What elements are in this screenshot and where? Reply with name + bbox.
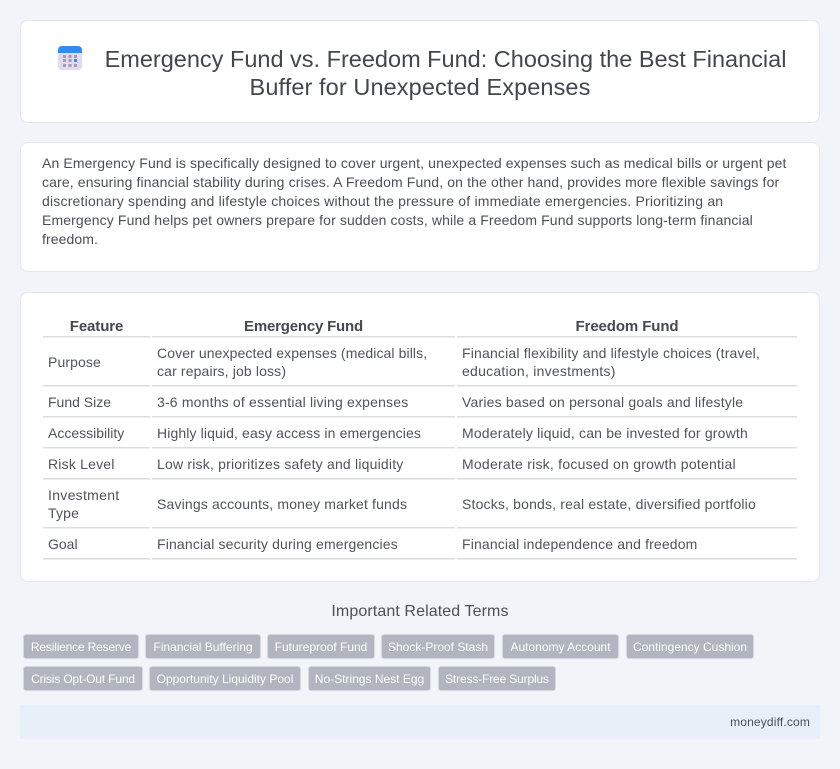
row: investment type: Savings accounts, money market funds: [157, 496, 407, 512]
table header row: [70, 318, 678, 335]
tag: [23, 666, 143, 691]
row: accessibility: Highly liquid, easy access in emergencies: [157, 425, 421, 441]
row: fund size: [48, 394, 743, 410]
tag: Crisis Opt-Out Fund: [31, 672, 135, 686]
row: risk level: [48, 456, 736, 472]
footer credit: moneydiff.com: [730, 715, 810, 729]
table header row: Feature: [70, 318, 123, 335]
row: purpose: Financial flexibility and lifestyle choices (travel,: [462, 345, 760, 361]
row: risk level: Moderate risk, focused on growth potential: [462, 456, 736, 472]
row: risk level: Risk Level: [48, 456, 115, 472]
related term tags: [23, 634, 754, 691]
row: purpose: Purpose: [48, 354, 101, 370]
row: purpose: [48, 345, 760, 379]
intro text: [42, 155, 787, 247]
icon: calendar: [58, 46, 82, 70]
intro text: discretionary spending and lifestyle choices without the pressure of immediate emergencies. Prioritizing an: [42, 193, 723, 209]
tag: [23, 634, 139, 659]
table rule lines: [43, 336, 797, 560]
table header row: Freedom Fund: [576, 318, 678, 335]
tag: Shock-Proof Stash: [388, 640, 488, 654]
row: fund size: 3-6 months of essential living expenses: [157, 394, 408, 410]
title: Emergency Fund vs. Freedom Fund: Choosing the Best Financial: [105, 46, 786, 72]
title: Buffer for Unexpected Expenses: [250, 74, 590, 100]
row: accessibility: Moderately liquid, can be invested for growth: [462, 425, 748, 441]
row: accessibility: [48, 425, 748, 441]
tag: [438, 666, 556, 691]
row: goal: Goal: [48, 536, 78, 552]
intro text: care, ensuring financial stability during crises. A Freedom Fund, on the other hand, provides more flexible savings for: [42, 174, 779, 190]
tag: [626, 634, 754, 659]
row: purpose: car repairs, job loss): [157, 363, 286, 379]
tag: [267, 634, 375, 659]
row: investment type: [48, 487, 756, 521]
row: investment type: Investment: [48, 487, 119, 503]
row: goal: [48, 536, 698, 552]
tag: Opportunity Liquidity Pool: [157, 672, 293, 686]
table header row: Emergency Fund: [244, 318, 363, 335]
title: [105, 46, 786, 100]
row: investment type: Type: [48, 505, 79, 521]
row: purpose: education, investments): [462, 363, 616, 379]
tag: Contingency Cushion: [633, 640, 747, 654]
tag: No-Strings Nest Egg: [315, 672, 424, 686]
panel: comparison table: [20, 292, 820, 582]
row: investment type: Stocks, bonds, real estate, diversified portfolio: [462, 496, 756, 512]
intro text: Emergency Fund helps pet owners prepare for sudden costs, while a Freedom Fund supports long-term financial: [42, 212, 753, 228]
row: accessibility: Accessibility: [48, 425, 124, 441]
panel: intro paragraph: [20, 142, 820, 272]
tag: [502, 634, 619, 659]
footer bar: [20, 705, 820, 739]
tag: [308, 666, 431, 691]
row: purpose: Cover unexpected expenses (medical bills,: [157, 345, 427, 361]
tag: Futureproof Fund: [275, 640, 367, 654]
tag: Financial Buffering: [153, 640, 253, 654]
tag: [381, 634, 495, 659]
row: fund size: Fund Size: [48, 394, 111, 410]
tag: [149, 666, 301, 691]
row: goal: Financial security during emergencies: [157, 536, 398, 552]
tag: Resilience Reserve: [31, 640, 131, 654]
tag: Stress-Free Surplus: [445, 672, 549, 686]
row: risk level: Low risk, prioritizes safety and liquidity: [157, 456, 404, 472]
tag: Autonomy Account: [510, 640, 611, 654]
heading: related terms: Important Related Terms: [331, 603, 509, 620]
row: goal: Financial independence and freedom: [462, 536, 698, 552]
row: fund size: Varies based on personal goals and lifestyle: [462, 394, 743, 410]
intro text: freedom.: [42, 231, 98, 247]
tag: [145, 634, 261, 659]
panel: header: [20, 20, 820, 123]
intro text: An Emergency Fund is specifically designed to cover urgent, unexpected expenses such as medical bills or urgent pet: [42, 155, 787, 171]
